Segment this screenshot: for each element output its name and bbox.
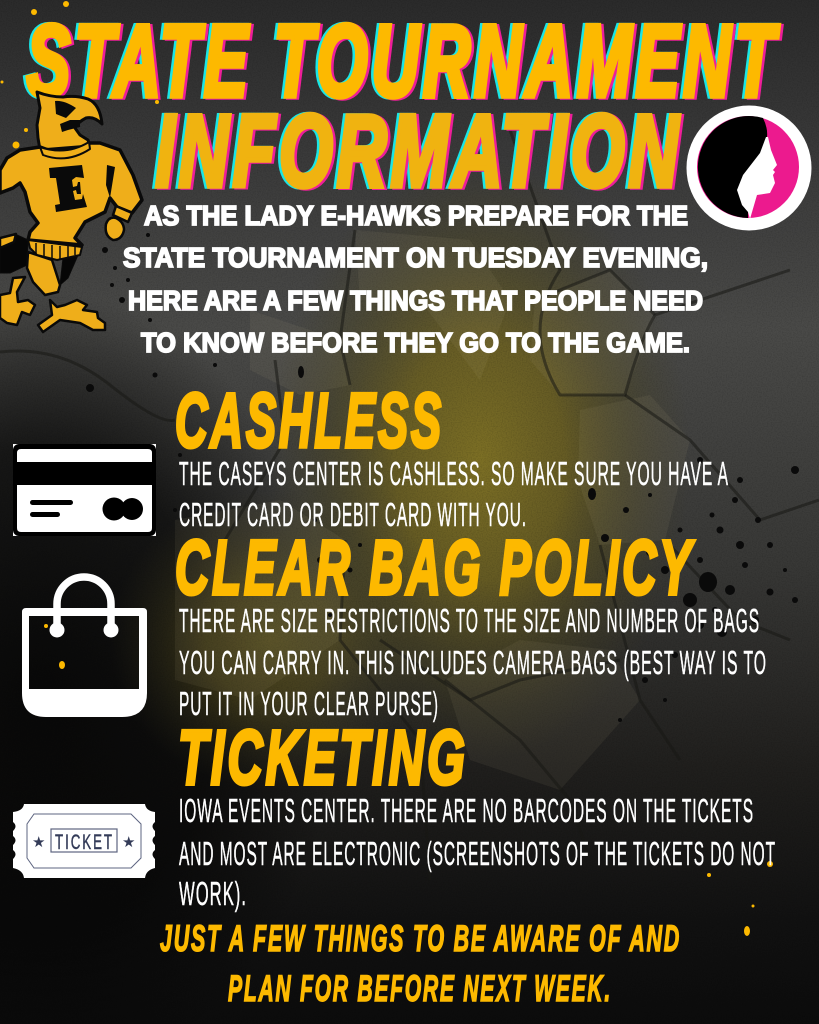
icon: E-Hawks mascot: [0, 92, 142, 332]
intro paragraph: STATE TOURNAMENT ON TUESDAY EVENING,: [123, 242, 708, 273]
icon: ticket: ★: [32, 833, 45, 851]
heading: cashless: CASHLESS: [175, 378, 444, 464]
intro paragraph: TO KNOW BEFORE THEY GO TO THE GAME.: [141, 327, 690, 358]
mascot collar: [40, 142, 90, 158]
icon: circular woman profile logo: [686, 106, 812, 230]
text: cashless details: [179, 455, 729, 533]
icon: credit card: [13, 444, 156, 536]
intro paragraph: [123, 200, 708, 358]
mascot legs and feet: [0, 234, 105, 332]
mascot cuff and fist: [106, 206, 132, 240]
mascot sweater: [0, 143, 142, 245]
mascot waistband: [28, 240, 82, 260]
mascot arm crease: [106, 165, 115, 198]
section: ticketing: [13, 715, 776, 912]
text: ticketing details: WORK).: [179, 875, 247, 912]
title: [24, 4, 782, 209]
icon: ticket: ★: [122, 833, 135, 851]
text: ticketing details: [179, 792, 776, 912]
mascot eye and beak line: [55, 101, 80, 132]
mascot letter E: [49, 165, 87, 212]
section: clear bag policy: [22, 525, 767, 722]
icon: ticket: TICKET: [55, 831, 114, 854]
text: clear bag details: PUT IT IN YOUR CLEAR PURSE): [179, 685, 439, 722]
mascot back leg shadow: [0, 235, 78, 285]
icon: ticket: [13, 804, 155, 878]
mascot head: [37, 92, 102, 150]
icon: shopping bag: [22, 577, 147, 717]
section: cashless: [13, 378, 729, 536]
closing message: [160, 918, 681, 1009]
intro paragraph: AS THE LADY E-HAWKS PREPARE FOR THE: [144, 200, 688, 231]
text: clear bag details: [179, 602, 767, 722]
heading: ticketing: TICKETING: [178, 715, 468, 801]
intro paragraph: HERE ARE A FEW THINGS THAT PEOPLE NEED: [128, 285, 703, 316]
